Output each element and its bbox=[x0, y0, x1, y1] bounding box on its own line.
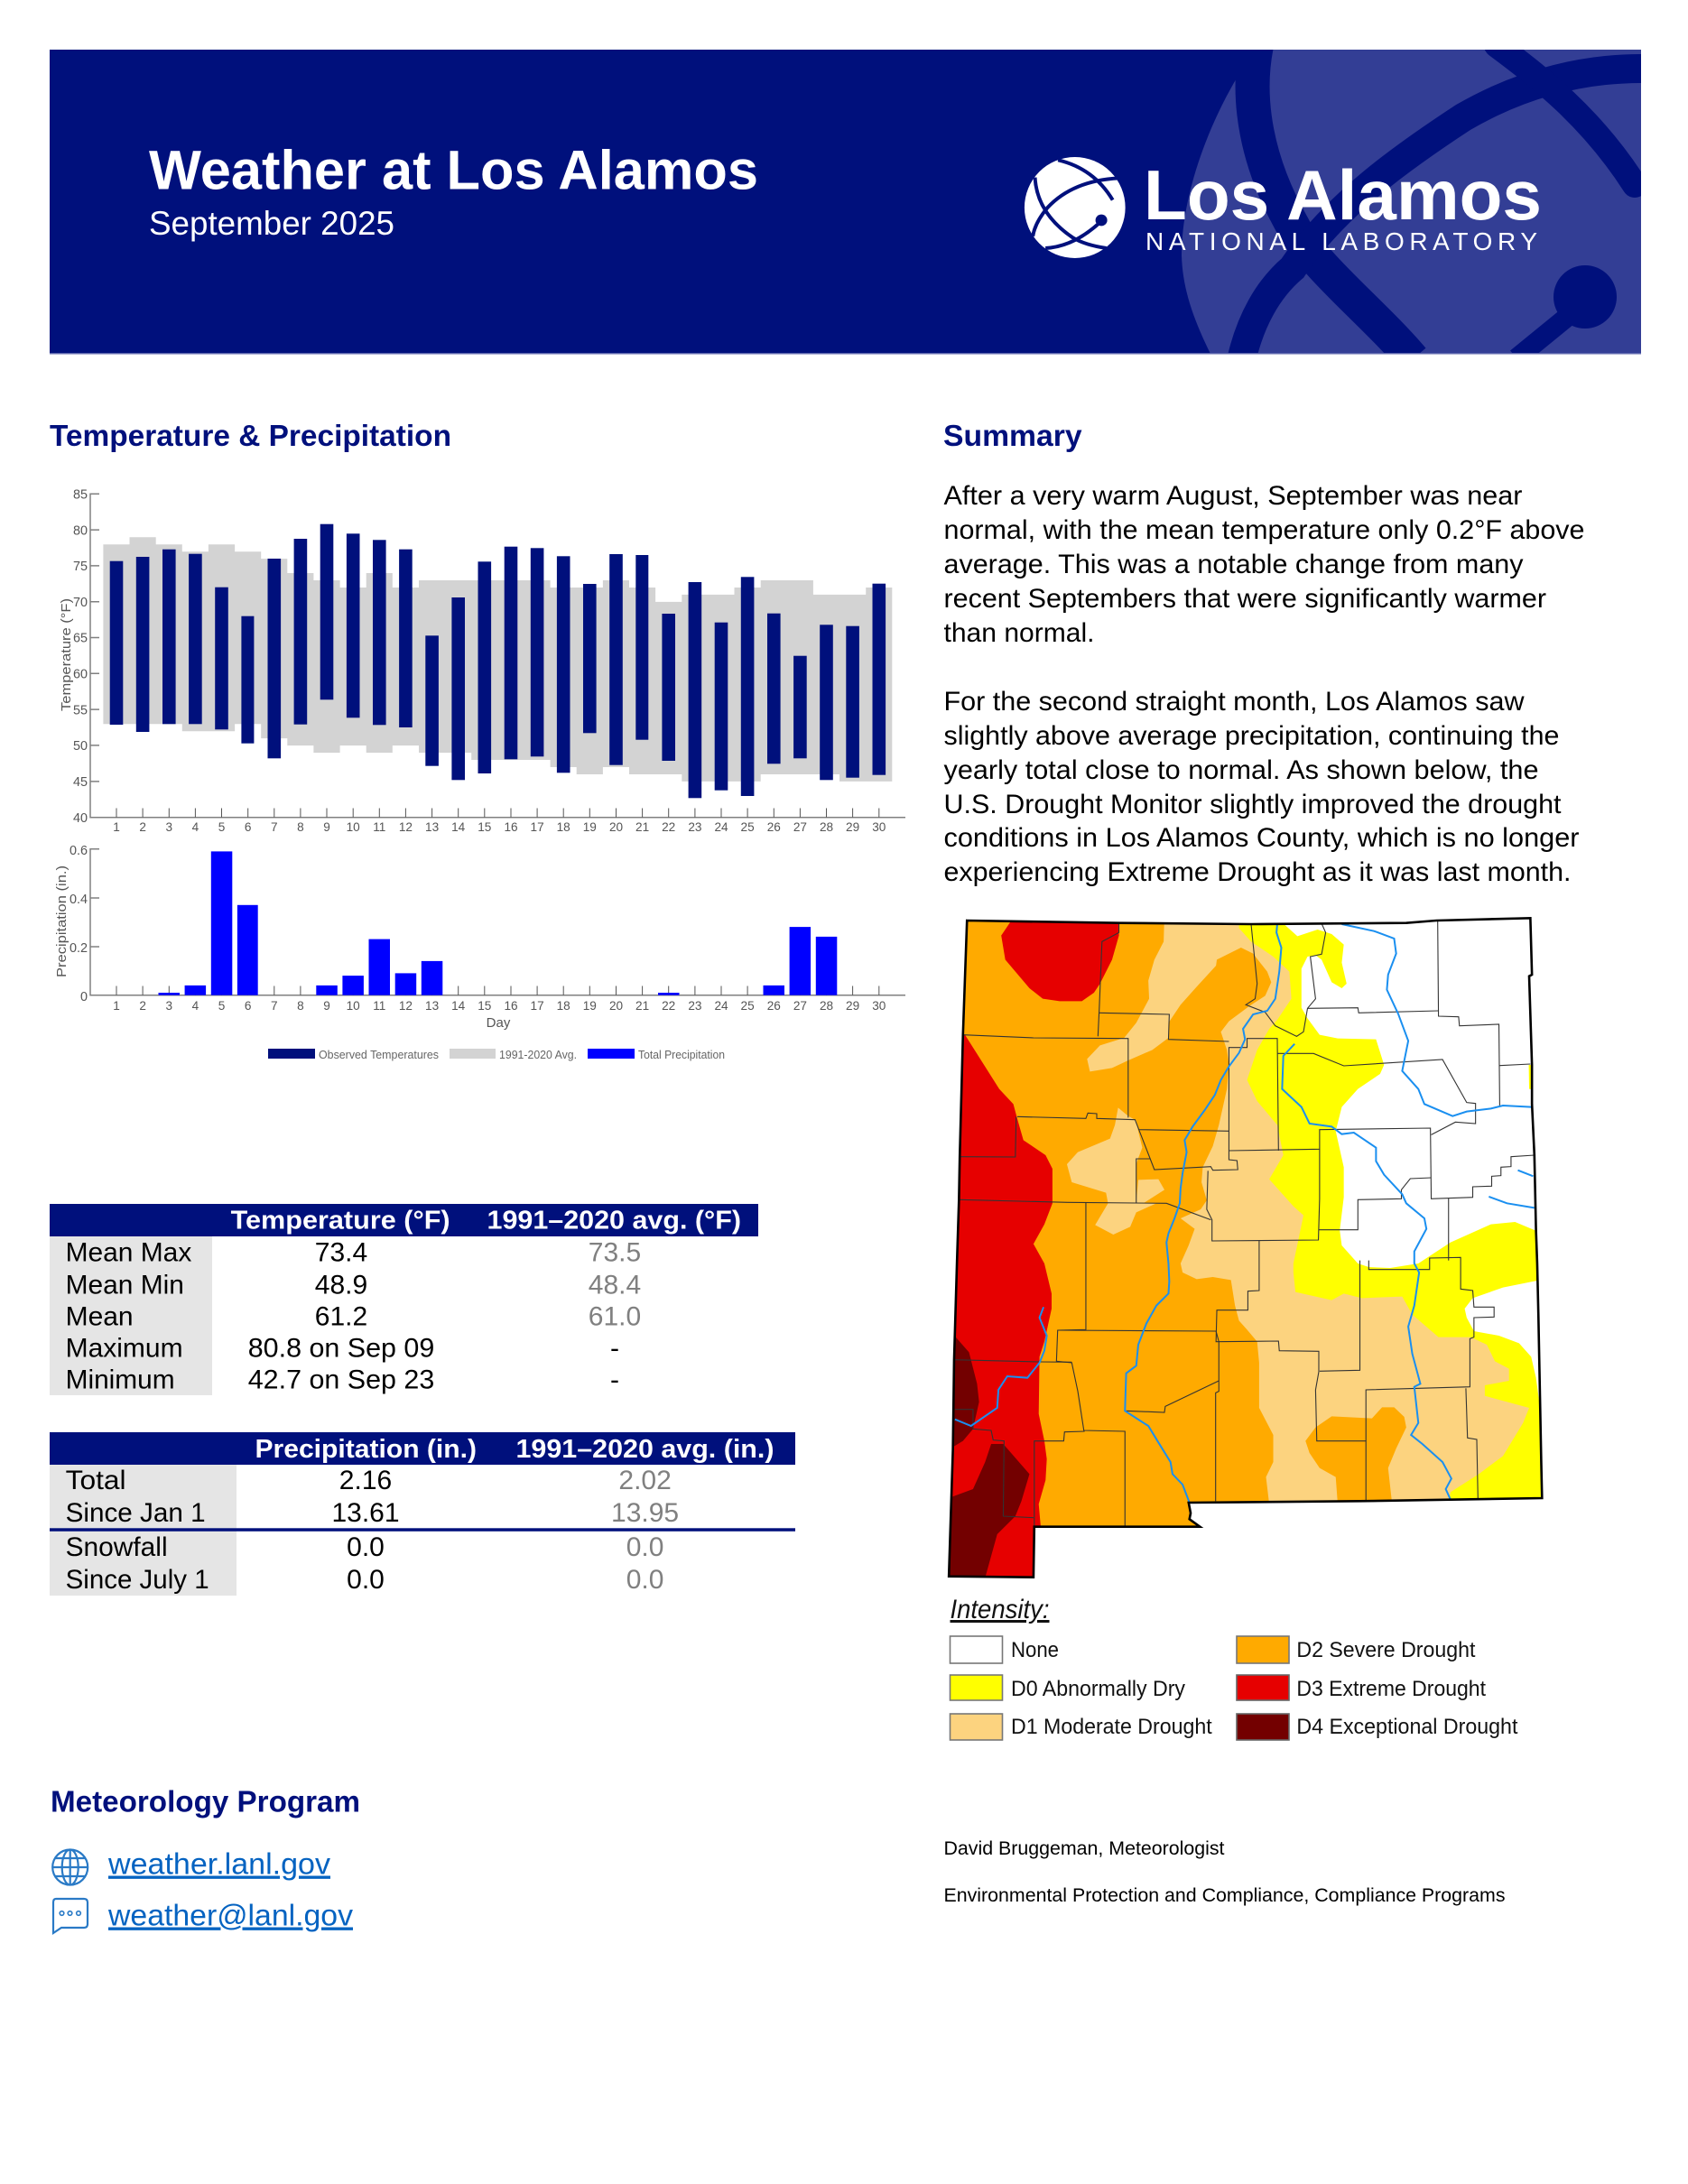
map legend: D2 Severe Drought bbox=[1296, 1638, 1476, 1662]
icon: globe bbox=[52, 1850, 88, 1884]
x axis labels: 2 bbox=[139, 999, 146, 1013]
D1 tan islands bbox=[1067, 1107, 1156, 1235]
x axis labels: 25 bbox=[741, 820, 755, 834]
x axis labels: 8 bbox=[297, 999, 304, 1013]
y axis labels: 85 bbox=[73, 487, 88, 502]
x axis labels: 18 bbox=[557, 999, 570, 1013]
x axis labels: 11 bbox=[373, 999, 385, 1013]
x axis labels: 13 bbox=[425, 999, 439, 1013]
x axis labels: 27 bbox=[793, 820, 807, 834]
observed temperature bars bbox=[110, 524, 886, 798]
table: temperature: 73.5 bbox=[589, 1238, 641, 1268]
x axis labels: 4 bbox=[192, 999, 199, 1013]
y axis labels: 45 bbox=[73, 775, 88, 790]
y axis labels: 40 bbox=[73, 811, 88, 826]
table: temperature: 61.0 bbox=[589, 1301, 641, 1331]
D2 orange south-east lobe bbox=[1305, 1407, 1406, 1504]
D0 yellow bbox=[1239, 914, 1555, 1504]
map legend bbox=[950, 1595, 1518, 1740]
x axis labels: 22 bbox=[662, 820, 675, 834]
table: precipitation: Total bbox=[66, 1466, 126, 1495]
organization credit: Environmental Protection and Compliance, Compliance Programs bbox=[944, 1885, 1506, 1906]
x axis labels: 23 bbox=[688, 820, 701, 834]
y axis labels: 60 bbox=[73, 668, 88, 682]
icon: chat bubble bbox=[53, 1899, 88, 1933]
x axis labels: 9 bbox=[323, 999, 330, 1013]
table: temperature: 48.4 bbox=[589, 1270, 641, 1300]
x axis labels: 19 bbox=[583, 999, 597, 1013]
x axis labels: 3 bbox=[166, 820, 172, 834]
summary paragraph 1: average. This was a notable change from many bbox=[944, 550, 1524, 579]
title: Weather at Los Alamos bbox=[149, 139, 758, 200]
x axis labels: 26 bbox=[767, 820, 781, 834]
y axis labels: 75 bbox=[73, 560, 88, 574]
header banner bbox=[50, 45, 1647, 361]
x axis labels: 15 bbox=[478, 820, 491, 834]
county lines bbox=[954, 921, 1535, 1527]
precipitation chart bbox=[54, 844, 905, 1031]
y axis title: Precipitation (in.) bbox=[54, 865, 70, 977]
y axis labels bbox=[70, 844, 88, 1004]
x axis labels: 28 bbox=[820, 999, 833, 1013]
table: temperature: Minimum bbox=[66, 1365, 175, 1394]
table: precipitation: 2.02 bbox=[618, 1466, 672, 1495]
table: precipitation: 0.0 bbox=[626, 1565, 663, 1595]
table: temperature: 61.2 bbox=[315, 1301, 367, 1331]
map: New Mexico drought monitor bbox=[931, 912, 1560, 1586]
D3 red north-west bbox=[1001, 914, 1119, 1001]
summary paragraph 1: than normal. bbox=[944, 618, 1094, 648]
heading: Summary: Summary bbox=[943, 419, 1082, 452]
y axis labels: 70 bbox=[73, 596, 88, 610]
table: temperature: - bbox=[610, 1333, 619, 1363]
table: precipitation: 13.95 bbox=[611, 1498, 679, 1528]
summary paragraph 2: slightly above average precipitation, continuing the bbox=[944, 721, 1560, 751]
author credit: David Bruggeman, Meteorologist bbox=[944, 1838, 1225, 1859]
x axis labels: 1 bbox=[113, 820, 120, 834]
x axis labels: 14 bbox=[451, 820, 466, 834]
x axis labels: 9 bbox=[323, 820, 330, 834]
x axis labels: 6 bbox=[245, 999, 251, 1013]
x axis labels: 29 bbox=[846, 820, 859, 834]
table: precipitation: Precipitation (in.) bbox=[255, 1435, 477, 1464]
D3 red west bbox=[952, 1035, 1053, 1576]
x axis labels: 12 bbox=[399, 820, 413, 834]
x axis labels: 5 bbox=[218, 999, 225, 1013]
table: precipitation: 0.0 bbox=[347, 1532, 385, 1562]
state outline bbox=[949, 918, 1542, 1578]
table: precipitation: Since July 1 bbox=[66, 1565, 209, 1595]
summary paragraph 2: conditions in Los Alamos County, which is no longer bbox=[944, 823, 1580, 853]
summary paragraph 2 bbox=[944, 687, 1580, 887]
logo wordmark: Los Alamos bbox=[1144, 155, 1542, 235]
table: precipitation: 13.61 bbox=[331, 1498, 400, 1528]
x axis labels: 17 bbox=[531, 999, 544, 1013]
map legend: D4 Exceptional Drought bbox=[1296, 1715, 1518, 1739]
D4 maroon bbox=[954, 1337, 979, 1446]
legend heading: Intensity: bbox=[950, 1595, 1049, 1624]
rivers bbox=[955, 923, 1535, 1503]
y axis labels bbox=[73, 487, 88, 826]
table: precipitation: 0.0 bbox=[347, 1565, 385, 1595]
icon: Los Alamos logo globe bbox=[1025, 157, 1126, 258]
map legend: D0 Abnormally Dry bbox=[1011, 1677, 1185, 1701]
x axis labels: 1 bbox=[113, 999, 120, 1013]
summary paragraph 1: After a very warm August, September was near bbox=[944, 481, 1523, 511]
summary paragraph 1: recent Septembers that were significantly warmer bbox=[944, 584, 1546, 614]
axes bbox=[90, 494, 905, 818]
table: temperature: - bbox=[610, 1365, 619, 1394]
y axis labels: 55 bbox=[73, 703, 88, 717]
x axis labels: 24 bbox=[714, 820, 728, 834]
summary paragraph 2: experiencing Extreme Drought as it was last month. bbox=[944, 857, 1571, 887]
table: temperature: 42.7 on Sep 23 bbox=[248, 1365, 434, 1394]
x axis labels: 13 bbox=[425, 820, 439, 834]
table: precipitation: 1991–2020 avg. (in.) bbox=[516, 1435, 774, 1464]
subtitle: September 2025 bbox=[149, 205, 394, 242]
table: temperature: 1991–2020 avg. (°F) bbox=[487, 1207, 741, 1235]
map legend: D1 Moderate Drought bbox=[1011, 1715, 1212, 1739]
table: temperature: Mean bbox=[66, 1301, 134, 1331]
x axis labels bbox=[113, 820, 886, 834]
x axis labels: 22 bbox=[662, 999, 675, 1013]
table: temperature: Temperature (°F) bbox=[231, 1207, 450, 1235]
chart legend bbox=[268, 1048, 725, 1061]
table: temperature: 48.9 bbox=[315, 1270, 367, 1300]
precipitation bars bbox=[159, 851, 837, 995]
x axis labels: 20 bbox=[609, 820, 623, 834]
y axis labels: 65 bbox=[73, 632, 88, 646]
x axis labels: 7 bbox=[271, 820, 278, 834]
x axis labels: 17 bbox=[531, 820, 544, 834]
x axis labels: 11 bbox=[373, 820, 385, 834]
table: precipitation: 2.16 bbox=[339, 1466, 392, 1495]
x axis labels: 23 bbox=[688, 999, 701, 1013]
table: temperature: Maximum bbox=[66, 1333, 183, 1363]
x axis labels: 28 bbox=[820, 820, 833, 834]
D2 orange main bbox=[964, 921, 1274, 1525]
map legend: None bbox=[1011, 1638, 1059, 1662]
link: email: weather@lanl.gov bbox=[107, 1899, 353, 1933]
table: temperature: Mean Max bbox=[66, 1238, 191, 1268]
chart legend: Observed Temperatures bbox=[319, 1048, 439, 1061]
x axis labels: 14 bbox=[451, 999, 466, 1013]
link: website: weather.lanl.gov bbox=[107, 1848, 330, 1881]
x axis labels: 21 bbox=[635, 999, 649, 1013]
chart legend: Total Precipitation bbox=[638, 1048, 725, 1061]
y axis labels: 0.2 bbox=[70, 941, 88, 956]
summary paragraph 2: For the second straight month, Los Alamos saw bbox=[944, 687, 1525, 717]
table: precipitation: 0.0 bbox=[626, 1532, 663, 1562]
table: temperature: 80.8 on Sep 09 bbox=[248, 1333, 434, 1363]
table: precipitation: Since Jan 1 bbox=[66, 1498, 206, 1528]
x axis labels: 30 bbox=[872, 999, 886, 1013]
x axis labels: 20 bbox=[609, 999, 623, 1013]
x axis labels: 7 bbox=[271, 999, 278, 1013]
table: temperature: Mean Min bbox=[66, 1270, 184, 1300]
x axis labels: 21 bbox=[635, 820, 649, 834]
x axis labels: 10 bbox=[347, 999, 360, 1013]
axes bbox=[90, 849, 905, 995]
y axis labels: 0 bbox=[80, 990, 88, 1004]
x axis labels: 15 bbox=[478, 999, 491, 1013]
x axis labels: 16 bbox=[504, 999, 518, 1013]
summary paragraph 2: U.S. Drought Monitor slightly improved the drought bbox=[944, 790, 1562, 819]
table: temperature bbox=[50, 1204, 758, 1395]
x axis labels: 12 bbox=[399, 999, 413, 1013]
y axis labels: 0.4 bbox=[70, 893, 88, 907]
x axis labels: 19 bbox=[583, 820, 597, 834]
x axis labels: 5 bbox=[218, 820, 225, 834]
x axis labels: 16 bbox=[504, 820, 518, 834]
map legend: D3 Extreme Drought bbox=[1296, 1677, 1486, 1701]
None white NE bbox=[1284, 914, 1555, 1268]
None white SE notch bbox=[1464, 1281, 1539, 1401]
x axis labels: 10 bbox=[347, 820, 360, 834]
avg band bbox=[103, 537, 892, 782]
x axis labels: 6 bbox=[245, 820, 251, 834]
summary paragraph 1 bbox=[944, 481, 1585, 648]
x axis labels: 30 bbox=[872, 820, 886, 834]
temperature chart bbox=[59, 487, 905, 834]
table: precipitation: Snowfall bbox=[66, 1532, 168, 1562]
x axis labels: 3 bbox=[166, 999, 172, 1013]
table: temperature: 73.4 bbox=[315, 1238, 367, 1268]
x axis title: Day bbox=[487, 1015, 511, 1031]
chart legend: 1991-2020 Avg. bbox=[499, 1048, 577, 1061]
table: precipitation bbox=[50, 1432, 795, 1596]
y axis labels: 0.6 bbox=[70, 844, 88, 858]
y axis labels: 50 bbox=[73, 739, 88, 754]
y axis title: Temperature (°F) bbox=[59, 598, 74, 711]
heading: Meteorology Program: Meteorology Program bbox=[51, 1785, 360, 1818]
x axis labels: 25 bbox=[741, 999, 755, 1013]
summary paragraph 2: yearly total close to normal. As shown below, the bbox=[944, 755, 1538, 785]
y axis labels: 80 bbox=[73, 523, 88, 538]
x axis labels: 26 bbox=[767, 999, 781, 1013]
logo sub-wordmark: NATIONAL LABORATORY bbox=[1145, 227, 1537, 255]
x axis labels: 29 bbox=[846, 999, 859, 1013]
x axis labels: 2 bbox=[139, 820, 146, 834]
summary paragraph 1: normal, with the mean temperature only 0.2°F above bbox=[944, 515, 1585, 545]
x axis labels: 4 bbox=[192, 820, 199, 834]
heading: Temperature & Precipitation: Temperature & Precipitation bbox=[50, 419, 451, 452]
x axis labels bbox=[113, 999, 886, 1013]
x axis labels: 24 bbox=[714, 999, 728, 1013]
x axis labels: 8 bbox=[297, 820, 304, 834]
x axis labels: 18 bbox=[557, 820, 570, 834]
x axis labels: 27 bbox=[793, 999, 807, 1013]
